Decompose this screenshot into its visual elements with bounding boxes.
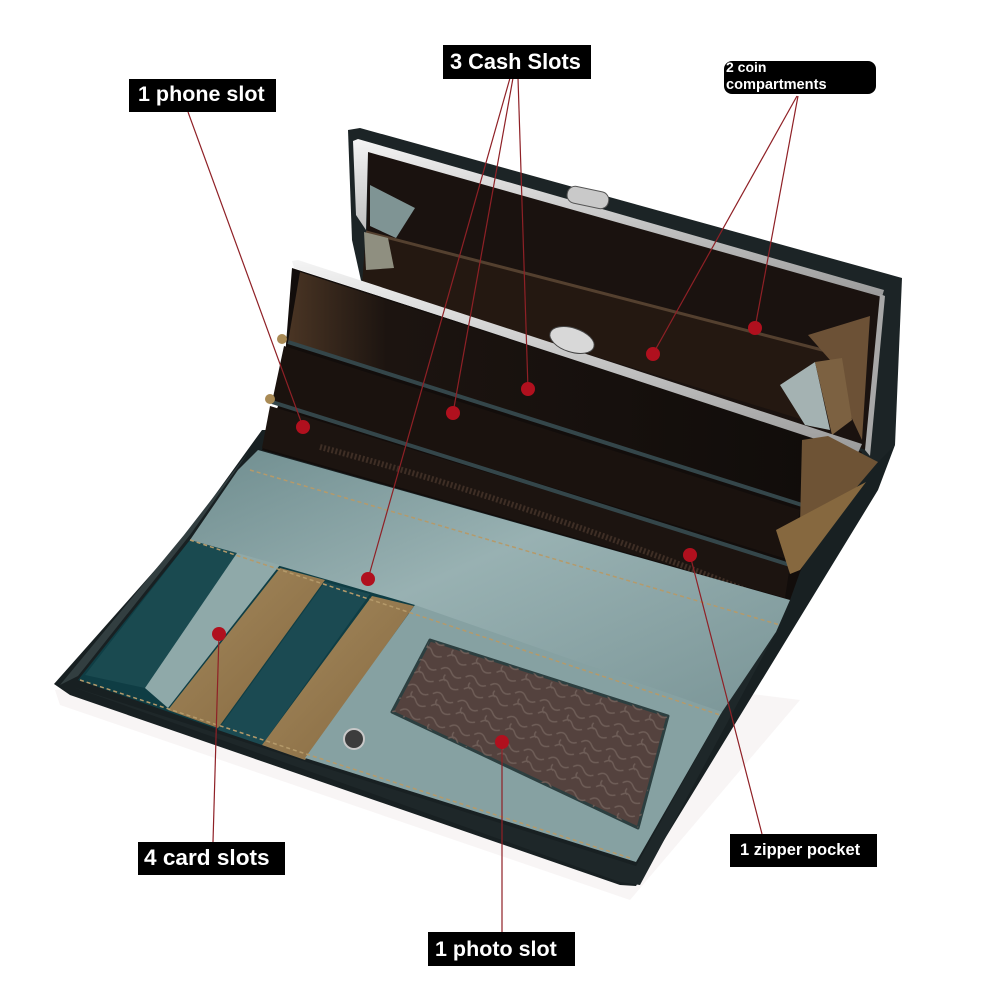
silver bar front bbox=[292, 260, 862, 453]
label: 1 photo slot bbox=[428, 932, 575, 966]
card slot 2 light bbox=[145, 553, 280, 708]
left coin compartment gusset bbox=[370, 185, 415, 238]
label: 3 cash slots: 3 Cash Slots bbox=[450, 49, 581, 74]
left edge of lower flap bbox=[60, 450, 250, 685]
back panel outer bbox=[348, 128, 902, 470]
stitching bbox=[80, 470, 780, 858]
bottom rim bbox=[70, 632, 776, 885]
marker dots bbox=[212, 321, 762, 749]
soft shadow bbox=[55, 660, 800, 900]
label: 1 phone slot: 1 phone slot bbox=[138, 82, 265, 106]
section 1 bbox=[288, 272, 835, 505]
label: 4 card slots: 4 card slots bbox=[144, 845, 270, 870]
card slot 1 dark teal bbox=[85, 540, 237, 688]
teal leather panel bbox=[190, 450, 790, 714]
card slots base bbox=[78, 540, 415, 760]
card slot 5 tan bbox=[262, 596, 414, 760]
label: 3 cash slots bbox=[443, 45, 591, 79]
photo window bbox=[392, 640, 668, 828]
label: 1 zipper pocket bbox=[730, 834, 877, 867]
leader lines bbox=[188, 78, 798, 934]
card slot 4 dark teal bbox=[218, 582, 370, 745]
divider edges bbox=[272, 342, 802, 565]
right coin compartment gusset bbox=[808, 316, 870, 440]
back clasp bbox=[566, 185, 610, 210]
label: 2 coin compartments bbox=[724, 59, 876, 94]
section 3 bbox=[262, 406, 790, 598]
label: 2 coin compartments: compartments bbox=[726, 77, 827, 93]
back silver frame bbox=[353, 139, 884, 297]
back panel pocket slot bbox=[362, 232, 830, 425]
label: 4 card slots bbox=[138, 842, 285, 875]
label: 1 photo slot: 1 photo slot bbox=[435, 937, 557, 961]
photo slot surround bbox=[305, 605, 722, 862]
label: 1 zipper pocket: 1 zipper pocket bbox=[740, 841, 861, 859]
front clasp bbox=[546, 321, 598, 359]
label: 1 phone slot bbox=[129, 79, 276, 112]
section 2 bbox=[272, 346, 800, 560]
middle compartments dark body bbox=[262, 268, 862, 600]
wallet bbox=[54, 128, 902, 900]
right front gusset bbox=[800, 436, 878, 525]
snap button bbox=[344, 729, 364, 749]
brass side knobs bbox=[277, 334, 287, 344]
lower flap outer bbox=[54, 430, 895, 886]
back right silver strip bbox=[865, 294, 885, 456]
card slot 3 tan bbox=[168, 568, 325, 728]
back panel interior bbox=[366, 150, 882, 450]
zipper bbox=[320, 447, 745, 590]
label: 2 coin compartments: 2 coin bbox=[726, 59, 766, 75]
